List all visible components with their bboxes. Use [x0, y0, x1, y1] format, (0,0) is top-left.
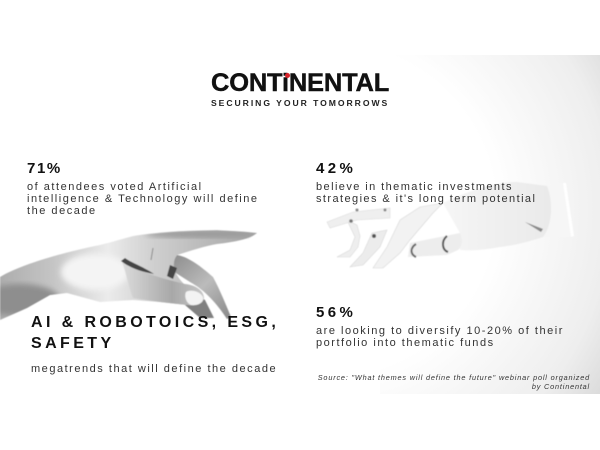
middle finger: [168, 255, 231, 319]
stat text: strategies & it's long term potential: [316, 193, 536, 205]
index finger: [373, 203, 443, 268]
source note: [318, 373, 590, 390]
stat: 42%: [316, 160, 536, 205]
stat text: are looking to diversify 10-20% of their: [316, 325, 564, 337]
logo red dot: [284, 73, 290, 78]
thumbnail: [185, 291, 203, 305]
forearm: [443, 182, 551, 250]
wrist cuff: [543, 183, 571, 237]
shading: [0, 284, 60, 316]
stat text: believe in thematic investments: [316, 181, 513, 193]
ring finger: [178, 284, 214, 318]
stat text: [316, 325, 564, 349]
stat text: of attendees voted Artificial: [27, 181, 203, 193]
stat text: intelligence & Technology will define: [27, 193, 259, 205]
hand silhouette: [0, 230, 257, 320]
little finger: [327, 208, 390, 228]
megatrends title: SAFETY: [31, 335, 115, 352]
middle finger: [350, 230, 387, 267]
stat: 71%: [27, 160, 259, 217]
thumb: [408, 233, 462, 257]
source note: Source: "What themes will define the future" webinar poll organized: [318, 373, 590, 382]
megatrends title: AI & ROBOTOICS, ESG,: [31, 314, 279, 331]
ring finger: [337, 220, 360, 257]
logo wordmark: CONTiNENTAL: [211, 69, 389, 97]
stat text: [316, 181, 536, 205]
stat number: 42%: [316, 160, 356, 177]
stat text: the decade: [27, 205, 97, 217]
ring: [167, 265, 177, 279]
tagline: SECURING YOUR TOMORROWS: [211, 98, 389, 108]
stat number: 71%: [27, 160, 62, 177]
illustration: human hand: [0, 230, 257, 320]
stat number: 56%: [316, 304, 356, 321]
crease: [121, 258, 154, 274]
stat text: [27, 181, 259, 217]
stat text: portfolio into thematic funds: [316, 337, 495, 349]
logo: [211, 69, 389, 108]
heading: megatrends: [31, 314, 279, 375]
thumb: [122, 262, 204, 305]
stat: 56%: [316, 304, 564, 349]
source note: by Continental: [532, 382, 590, 390]
megatrends title: [31, 314, 279, 352]
megatrends subtitle: megatrends that will define the decade: [31, 363, 277, 375]
